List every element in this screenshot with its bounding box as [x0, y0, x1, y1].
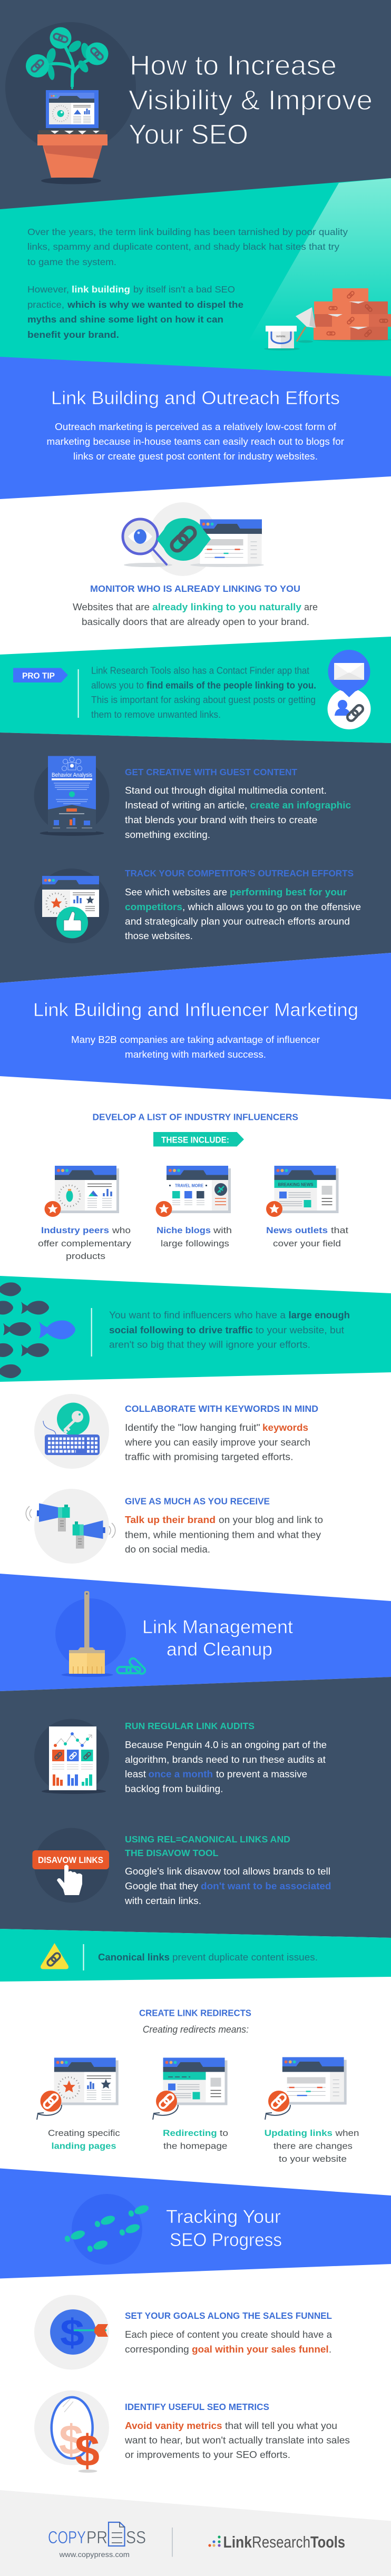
- panel: audits and disavow: [0, 1677, 391, 1938]
- text block: guest content: Stand out through digital multimedia content.: [125, 785, 327, 796]
- text block: influencer intro: Many B2B companies are taking advantage of influencer: [71, 1035, 320, 1045]
- label: redirecting: [163, 2128, 228, 2151]
- text block: pro tip: This is important for asking about guest posts or getting: [91, 695, 316, 705]
- heading: SET YOUR GOALS ALONG THE SALES FUNNEL: [125, 2310, 332, 2321]
- text block: monitor body: are: [304, 602, 318, 612]
- label: landing pages: Creating specific: [48, 2128, 120, 2138]
- text block: keywords: keywords: [262, 1422, 308, 1433]
- icon: school of fish: [0, 1282, 75, 1378]
- icon: news browser: BREAKING NEWS: [278, 1182, 314, 1187]
- heading: RUN REGULAR LINK AUDITS: [125, 1721, 255, 1731]
- heading: and Cleanup: [167, 1639, 272, 1660]
- logo: copypress: [48, 2522, 146, 2559]
- text block: intro paragraph two: practice,: [27, 299, 64, 310]
- text block: keywords: where you can easily improve your search: [124, 1437, 310, 1448]
- panel: header: [0, 0, 391, 211]
- text block: goals: Each piece of content you create should have a: [125, 2329, 333, 2340]
- badge: pro tip: PRO TIP: [22, 671, 55, 681]
- icon: dollar target: [34, 2295, 109, 2369]
- panel: footer: [0, 2490, 391, 2576]
- label: redirecting: the homepage: [163, 2141, 228, 2151]
- panel: monitor who is linking: [73, 502, 318, 627]
- text block: influencer intro: marketing with marked success.: [125, 1049, 266, 1060]
- text block: metrics: or improvements to your SEO efforts.: [125, 2450, 290, 2460]
- icon: homepage browser: [153, 2057, 228, 2120]
- label: news outlets: cover your field: [273, 1238, 341, 1248]
- card: news outlets: [266, 1166, 348, 1248]
- icon: disavow button: [33, 1828, 109, 1902]
- icon: mirror and dollar: [34, 2390, 109, 2475]
- text block: influencer size: aren't so big that they will ignore your efforts.: [109, 1340, 310, 1350]
- panel: tracking your seo progress: [0, 2168, 391, 2279]
- panel: create link redirects: [37, 2008, 359, 2164]
- text block: monitor body: [73, 602, 318, 627]
- text block: monitor body: already linking to you naturally: [152, 602, 301, 612]
- badge: these include: THESE INCLUDE:: [161, 1135, 229, 1145]
- text block: influencer size: large enough: [289, 1310, 350, 1321]
- heading: [142, 1617, 293, 1660]
- text block: intro paragraph one: Over the years, the term link building has been tarnished by poor quality: [27, 227, 348, 237]
- text block: goals: corresponding: [125, 2344, 189, 2355]
- text block: competitors: those websites.: [125, 931, 193, 941]
- heading: MONITOR WHO IS ALREADY LINKING TO YOU: [90, 583, 300, 594]
- text block: intro paragraph one: to game the system.: [27, 257, 116, 267]
- text block: guest content: something exciting.: [125, 830, 210, 840]
- card: industry peers: [38, 1166, 132, 1261]
- text block: outreach intro: marketing because in-house teams can easily reach out to blogs for: [46, 436, 344, 447]
- text block: competitors: and strategically plan your outreach efforts around: [125, 916, 350, 926]
- badge: these include: [153, 1132, 244, 1147]
- label: updating links: when: [335, 2128, 359, 2138]
- label: redirecting: to: [220, 2128, 228, 2138]
- text block: pro tip: allows you to: [91, 680, 144, 690]
- icon: audit report: [34, 1719, 109, 1794]
- text block: give: them, while mentioning them and what they: [125, 1529, 321, 1540]
- text block: pro tip: find emails of the people linking to you.: [146, 680, 316, 690]
- icon: plant growing from browser: [5, 22, 136, 184]
- title: Visibility & Improve: [129, 85, 373, 116]
- text block: competitors: See which websites are: [125, 887, 227, 897]
- icon: broom and links: [55, 1591, 146, 1677]
- icon: infographic thumbnail: [34, 756, 110, 836]
- icon: footprints: [64, 2194, 150, 2265]
- text block: monitor body: Websites that are: [73, 602, 150, 612]
- panel: introduction: [0, 178, 391, 377]
- icon: landing page browser: [37, 2057, 119, 2120]
- title: How to Increase: [130, 50, 337, 81]
- label: updating links: Updating links: [265, 2128, 333, 2138]
- text block: goals: [125, 2329, 333, 2355]
- text block: intro paragraph two: link building: [72, 284, 130, 295]
- panel: link building and influencer marketing: [0, 953, 391, 1099]
- card: niche blogs: [156, 1166, 232, 1248]
- text block: intro paragraph two: benefit your brand.: [27, 329, 119, 340]
- text block: give: [125, 1515, 323, 1555]
- label: news outlets: News outlets: [266, 1225, 328, 1235]
- text block: guest content: that blends your brand with theirs to create: [125, 815, 317, 825]
- text block: outreach intro: links or create guest post content for industry websites.: [73, 451, 318, 462]
- label: industry peers: products: [66, 1251, 105, 1261]
- panel: pro tip: [0, 637, 391, 743]
- heading: [166, 2207, 282, 2250]
- label: industry peers: [38, 1225, 132, 1261]
- icon: updating browser: [265, 2057, 347, 2120]
- heading: [125, 1834, 290, 1858]
- card: updating links: [265, 2057, 359, 2164]
- logo: linkresearchtools: [208, 2533, 345, 2551]
- text block: disavow: Google that they: [125, 1881, 198, 1891]
- text block: influencer size: social following to drive traffic: [109, 1325, 253, 1335]
- logo: copypress: SS: [126, 2528, 146, 2547]
- text block: monitor body: basically doors that are already open to your brand.: [82, 617, 309, 627]
- text block: metrics: [124, 2421, 350, 2460]
- logo: copypress: www.copypress.com: [59, 2550, 130, 2559]
- text block: audits: backlog from building.: [125, 1783, 223, 1794]
- card: redirecting: [153, 2057, 228, 2151]
- text block: keywords: [124, 1422, 310, 1462]
- heading: Link Building and Influencer Marketing: [33, 1000, 358, 1020]
- text block: canonical: prevent duplicate content issues.: [172, 1952, 318, 1963]
- icon: dollar target: $: [60, 2312, 84, 2354]
- heading: Link Management: [142, 1617, 293, 1637]
- panel: develop influencer list: [38, 1112, 348, 1261]
- label: updating links: [265, 2128, 359, 2164]
- icon: bricks, trowel and bucket: [264, 288, 391, 350]
- text block: competitors: performing best for your: [230, 887, 347, 897]
- text block: audits: Because Penguin 4.0 is an ongoing part of the: [125, 1740, 327, 1750]
- icon: warning triangle with link: [41, 1944, 69, 1969]
- text block: canonical: Canonical links: [98, 1952, 170, 1963]
- text block: competitors: competitors: [125, 902, 182, 912]
- text block: guest content: [125, 785, 351, 840]
- text block: intro paragraph two: myths and shine some light on how it can: [27, 314, 223, 325]
- panel: influencer size callout: [0, 1276, 391, 1382]
- heading: DEVELOP A LIST OF INDUSTRY INFLUENCERS: [93, 1112, 298, 1123]
- heading: USING REL=CANONICAL LINKS AND: [125, 1834, 290, 1845]
- heading: GET CREATIVE WITH GUEST CONTENT: [125, 767, 297, 777]
- logo: copypress: PR: [86, 2528, 107, 2547]
- panel: collaborate and give: [26, 1394, 323, 1564]
- badge: pro tip: [13, 668, 68, 682]
- heading: SEO Progress: [170, 2230, 282, 2250]
- panel: canonical links callout: [0, 1929, 391, 1982]
- label: news outlets: that: [331, 1225, 348, 1235]
- label: niche blogs: with: [213, 1225, 232, 1235]
- text block: metrics: want to hear, but won't actually translate into sales: [124, 2435, 350, 2445]
- icon: mirror and dollar: $: [75, 2426, 100, 2475]
- icon: key and keyboard: [34, 1394, 109, 1469]
- label: redirecting: Redirecting: [163, 2128, 217, 2138]
- title: [129, 50, 373, 150]
- icon: niche blog browser: TRAVEL MORE: [175, 1183, 203, 1188]
- text block: metrics: that will tell you what you: [225, 2421, 337, 2431]
- label: news outlets: [266, 1225, 348, 1248]
- text block: audits: least: [125, 1769, 146, 1779]
- text block: intro paragraph one: links, spammy and duplicate content, and shady black hat sites that try: [27, 241, 339, 252]
- icon: bricks, trowel and bucket: www.: [276, 335, 286, 338]
- label: industry peers: who: [112, 1225, 131, 1235]
- text block: disavow: with certain links.: [124, 1896, 201, 1906]
- text block: give: do on social media.: [125, 1544, 210, 1555]
- text block: influencer size: You want to find influencers who have a: [109, 1310, 286, 1321]
- heading: IDENTIFY USEFUL SEO METRICS: [125, 2402, 269, 2412]
- text block: audits: to prevent a massive: [216, 1769, 307, 1779]
- text block: audits: algorithm, brands need to run these audits at: [125, 1754, 326, 1765]
- heading: GIVE AS MUCH AS YOU RECEIVE: [125, 1496, 270, 1506]
- text block: goals: goal within your sales funnel: [192, 2344, 329, 2355]
- heading: CREATE LINK REDIRECTS: [139, 2008, 251, 2018]
- text block: disavow: Google's link disavow tool allows brands to tell: [125, 1866, 330, 1877]
- text block: pro tip: them to remove unwanted links.: [91, 709, 221, 720]
- logo: linkresearchtools: Link: [223, 2533, 252, 2551]
- text block: pro tip: Link Research Tools also has a Contact Finder app that: [91, 665, 309, 676]
- heading: THE DISAVOW TOOL: [125, 1848, 219, 1858]
- text block: outreach intro: Outreach marketing is perceived as a relatively low-cost form of: [55, 422, 337, 432]
- label: landing pages: landing pages: [52, 2141, 116, 2151]
- text block: audits: [125, 1740, 327, 1794]
- text block: intro paragraph two: However,: [27, 284, 69, 295]
- panel: link building and outreach efforts: [0, 357, 391, 499]
- text block: competitors: [125, 887, 361, 941]
- text block: outreach intro: [46, 422, 344, 462]
- text block: give: Talk up their brand: [125, 1515, 216, 1525]
- text block: influencer size: to your website, but: [256, 1325, 344, 1335]
- icon: megaphones: [26, 1489, 115, 1564]
- label: industry peers: offer complementary: [38, 1238, 132, 1248]
- text block: disavow: [124, 1866, 331, 1906]
- icon: disavow button: DISAVOW LINKS: [38, 1855, 103, 1865]
- text block: disavow: don't want to be associated: [201, 1881, 331, 1891]
- heading: COLLABORATE WITH KEYWORDS IN MIND: [125, 1403, 318, 1414]
- label: niche blogs: Niche blogs: [157, 1225, 211, 1235]
- icon: peers browser: [44, 1166, 119, 1217]
- text block: influencer size: [109, 1310, 350, 1350]
- text block: guest content: Instead of writing an article,: [125, 800, 248, 811]
- icon: email and linked contact: [328, 650, 371, 729]
- heading: TRACK YOUR COMPETITOR'S OUTREACH EFFORTS: [125, 868, 354, 879]
- text block: competitors: , which allows you to go on the offensive: [182, 902, 361, 912]
- panel: link management and cleanup: [0, 1574, 391, 1691]
- icon: news browser: [266, 1166, 338, 1217]
- text block: keywords: Identify the "low hanging fruit": [125, 1422, 260, 1433]
- label: niche blogs: large followings: [161, 1238, 229, 1248]
- heading: Tracking Your: [166, 2207, 281, 2227]
- icon: infographic thumbnail: Behavior Analysis: [52, 772, 92, 778]
- label: updating links: to your website: [279, 2154, 347, 2164]
- heading: Link Building and Outreach Efforts: [51, 388, 340, 408]
- text block: pro tip: [91, 665, 316, 720]
- text block: influencer intro: [71, 1035, 320, 1060]
- label: niche blogs: [157, 1225, 232, 1248]
- logo: linkresearchtools: Research: [252, 2533, 310, 2551]
- panel: dark outreach tactics: [0, 733, 391, 983]
- label: landing pages: [48, 2128, 120, 2151]
- text block: give: on your blog and link to: [219, 1515, 323, 1525]
- text block: intro paragraph two: [27, 284, 243, 340]
- label: industry peers: Industry peers: [41, 1225, 109, 1235]
- text block: canonical: [98, 1952, 318, 1963]
- text block: audits: once a month: [149, 1769, 213, 1779]
- text block: intro paragraph one: [27, 227, 348, 267]
- text block: intro paragraph two: which is why we wanted to dispel the: [67, 299, 243, 310]
- text block: metrics: Avoid vanity metrics: [125, 2421, 222, 2431]
- icon: mirror and dollar: $: [59, 2416, 83, 2463]
- logo: linkresearchtools: Tools: [310, 2533, 345, 2551]
- label: updating links: there are changes: [273, 2141, 353, 2151]
- title: Your SEO: [129, 119, 248, 150]
- panel: goals and metrics: [34, 2295, 350, 2475]
- icon: magnifier, link and browser: [123, 502, 264, 576]
- logo: copypress: COPY: [48, 2528, 86, 2547]
- text block: keywords: traffic with promising targeted efforts.: [125, 1451, 293, 1462]
- icon: browser with thumbs up: [34, 869, 109, 943]
- text block: guest content: create an infographic: [250, 800, 351, 811]
- text block: intro paragraph two: by itself isn't a bad SEO: [133, 284, 235, 295]
- text block: goals: .: [329, 2344, 331, 2355]
- icon: niche blog browser: [156, 1166, 231, 1217]
- subheading: Creating redirects means:: [143, 2024, 249, 2035]
- card: landing pages: [37, 2057, 120, 2151]
